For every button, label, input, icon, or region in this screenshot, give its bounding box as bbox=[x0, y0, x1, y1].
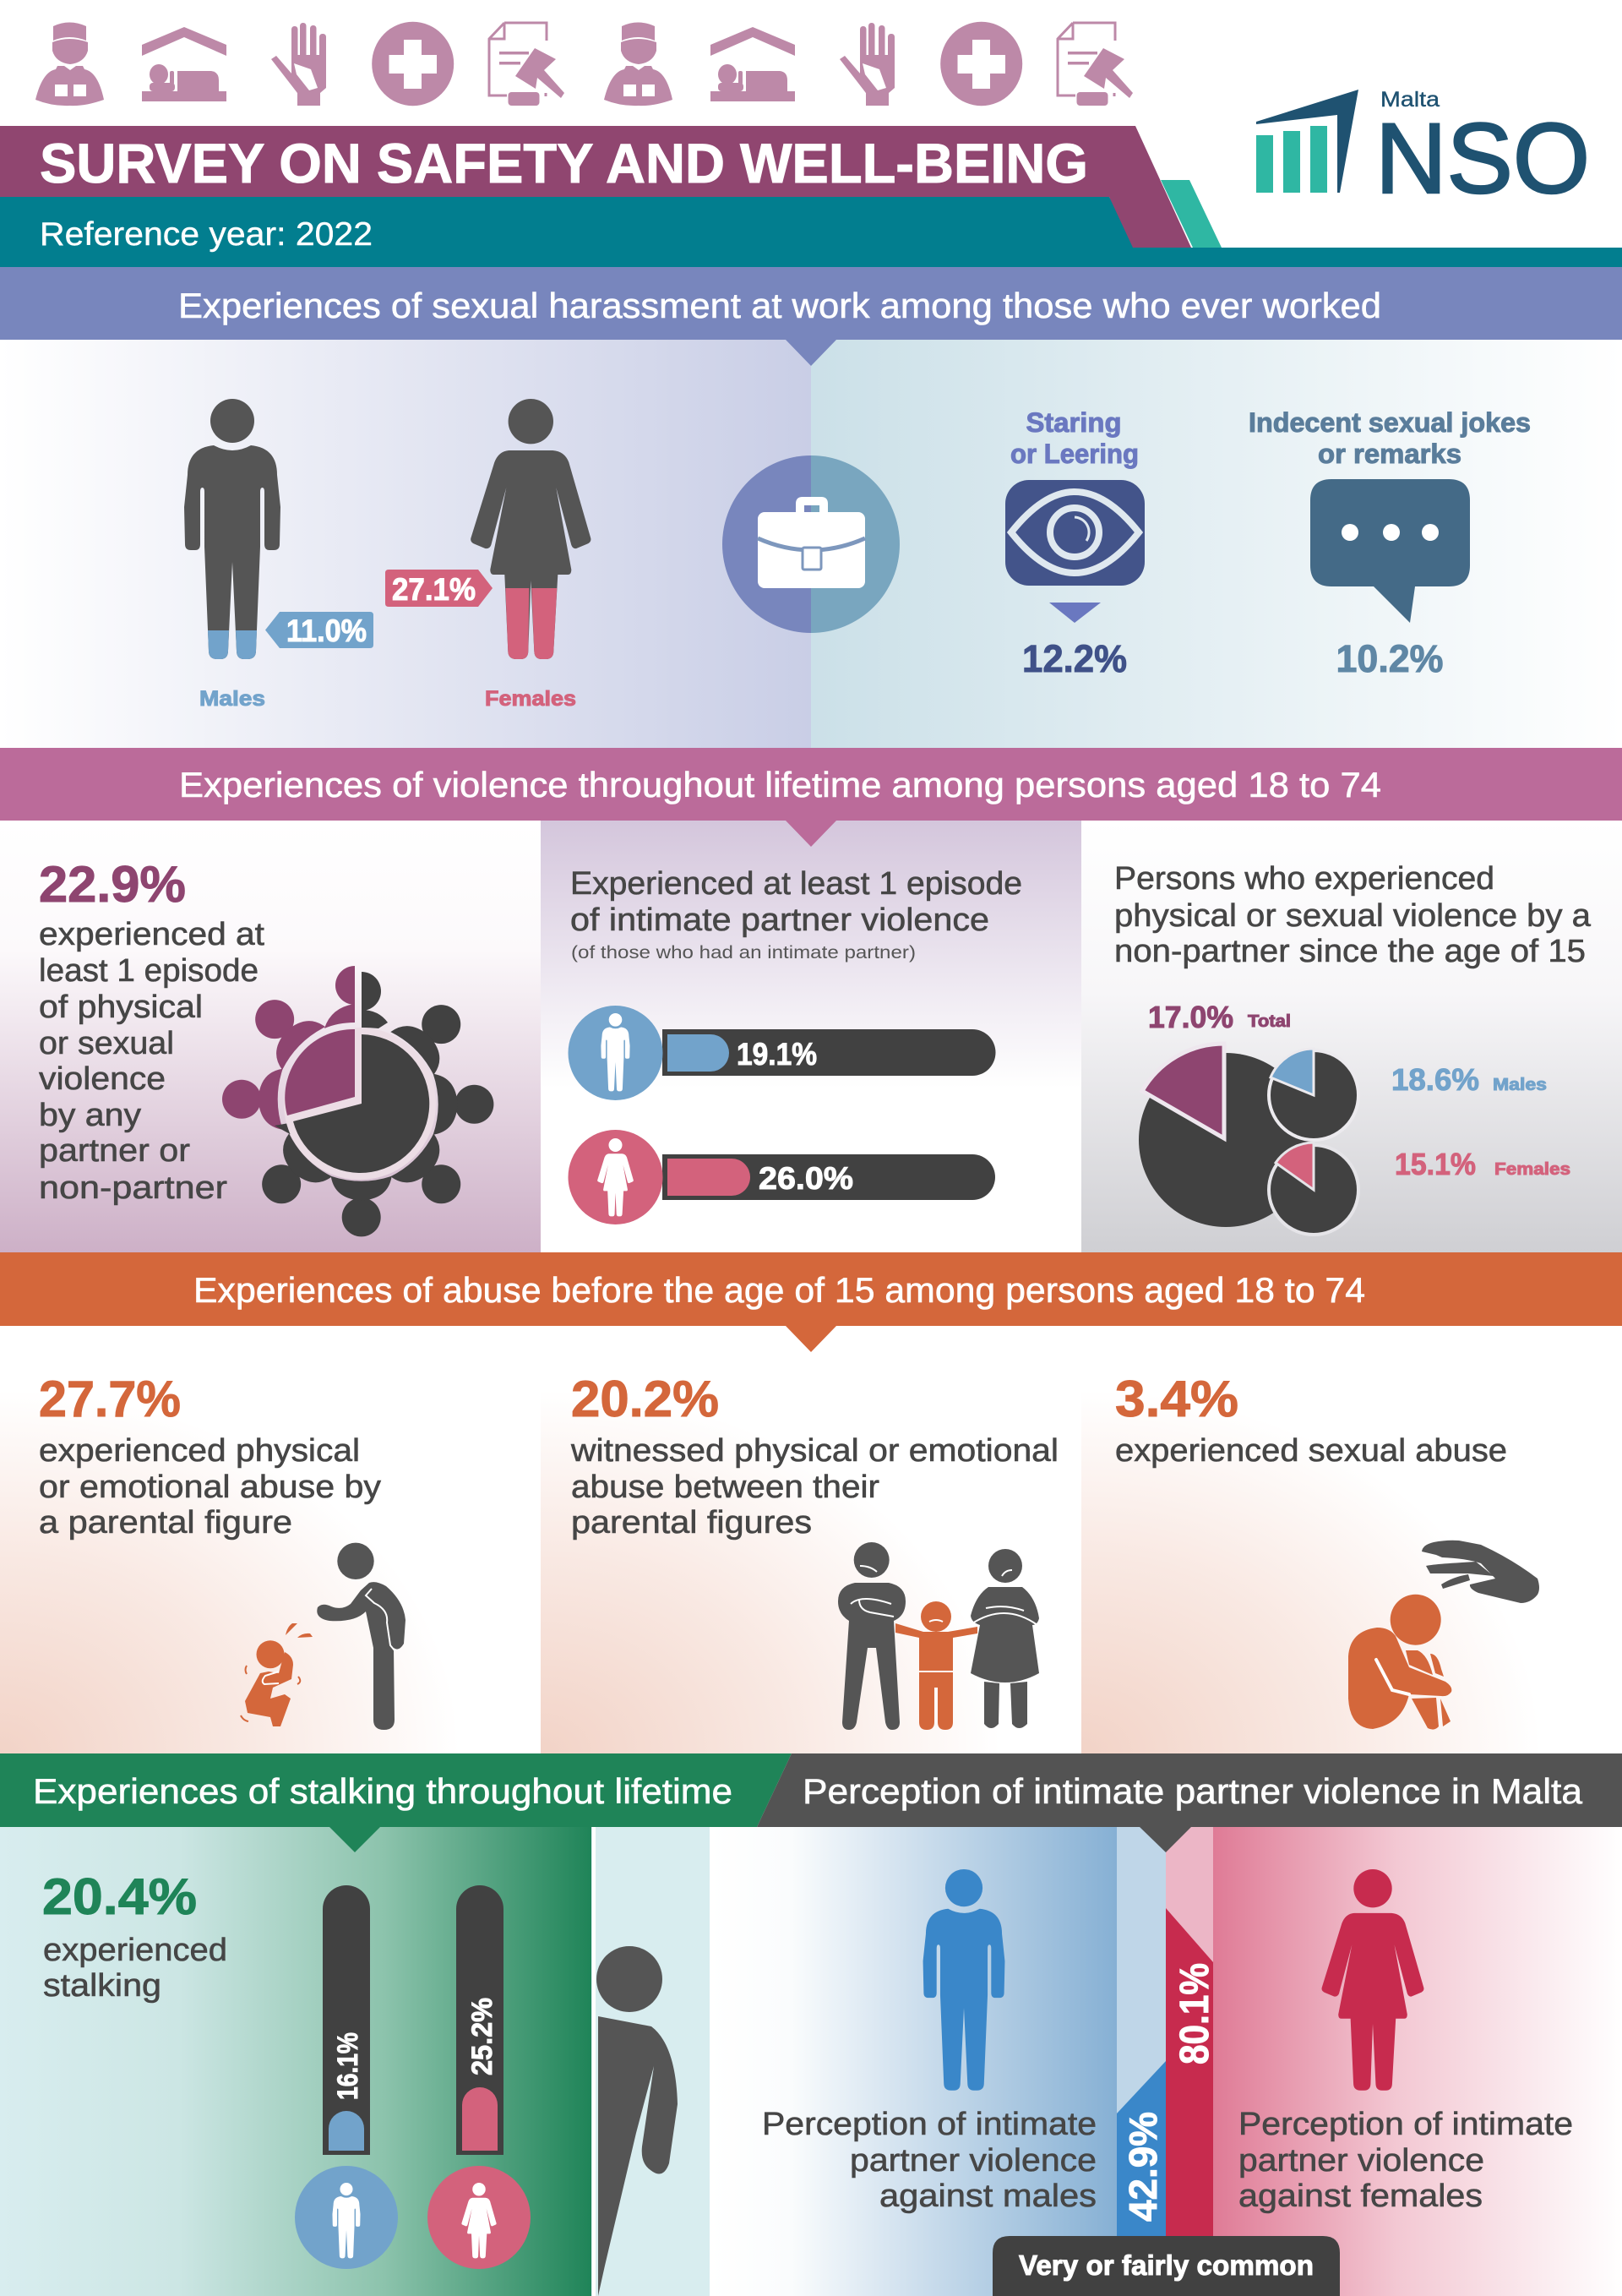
text: against males: against males bbox=[879, 2179, 1097, 2214]
text: intimate partner violence bbox=[570, 866, 1022, 963]
text: witnessed abuse: witnessed physical or emotional bbox=[570, 1433, 1059, 1469]
label: 11.0%: 11.0% bbox=[286, 614, 367, 648]
person: upper right bbox=[390, 989, 476, 1075]
person: top split bbox=[324, 966, 388, 1028]
heading band: Experiences of abuse before the age of 15 among persons aged 18 to 74 bbox=[193, 1270, 1365, 1310]
text: witnessed abuse bbox=[570, 1433, 1059, 1541]
heading band bbox=[0, 1252, 1622, 1352]
panel: sexual harassment at work bbox=[0, 267, 1622, 748]
label: males bbox=[1391, 1062, 1547, 1097]
teal accent bbox=[1161, 180, 1222, 248]
heading: staring or leering: Staring bbox=[1026, 407, 1122, 438]
person: right bbox=[433, 1074, 493, 1135]
bar: females 80.1%: 80.1% bbox=[1173, 1963, 1217, 2064]
header icon strip bbox=[35, 22, 564, 106]
icon: briefcase bbox=[722, 455, 900, 633]
bar: females 25.2% bbox=[456, 1885, 503, 2155]
reference year: Reference year: 2022 bbox=[40, 216, 373, 253]
panel: stalking throughout lifetime bbox=[0, 1753, 792, 2296]
bar: males 42.9%: 42.9% bbox=[1121, 2112, 1165, 2222]
person: lower right bbox=[390, 1133, 476, 1219]
header icon strip repeat bbox=[604, 22, 1133, 106]
text: non-partner violence: physical or sexual violence by a bbox=[1114, 898, 1592, 934]
logo: Malta NSO bbox=[1256, 88, 1590, 215]
text: any partner: experienced at bbox=[39, 917, 264, 952]
text: intimate partner violence: (of those who had an intimate partner) bbox=[571, 943, 916, 963]
value: 3.4%: 3.4% bbox=[1115, 1371, 1238, 1427]
text: intimate partner violence: of intimate partner violence bbox=[570, 903, 989, 938]
panel: abuse before age 15 bbox=[0, 1252, 1622, 1753]
text: any partner: partner or bbox=[39, 1133, 190, 1169]
title banner bbox=[0, 126, 1622, 267]
icon: medical cross bbox=[372, 22, 454, 106]
table ring bbox=[284, 1028, 436, 1180]
text: any partner: least 1 episode bbox=[39, 953, 259, 989]
label: 27.1%: 27.1% bbox=[392, 572, 476, 607]
heading band: Experiences of stalking throughout lifetime bbox=[33, 1771, 732, 1811]
table share bbox=[285, 1029, 355, 1115]
person: left (share) bbox=[222, 1069, 283, 1130]
text: sexual abuse: experienced sexual abuse bbox=[1115, 1433, 1507, 1469]
label: total: 17.0% bbox=[1148, 1000, 1233, 1034]
text: non-partner violence bbox=[1114, 861, 1592, 969]
text: parental abuse bbox=[39, 1433, 381, 1541]
icon: family bbox=[838, 1542, 1039, 1730]
column backgrounds bbox=[0, 1326, 1622, 1753]
heading band bbox=[0, 267, 1622, 366]
heading band: Perception of intimate partner violence in Malta bbox=[803, 1771, 1583, 1811]
heading band bbox=[0, 1753, 792, 1852]
text: against females bbox=[1238, 2107, 1573, 2214]
label: females bbox=[1395, 1147, 1570, 1181]
figure: male bbox=[184, 399, 280, 659]
pie: males bbox=[1267, 1049, 1360, 1142]
teal base band bbox=[0, 248, 1622, 267]
text: against females: Perception of intimate bbox=[1238, 2107, 1573, 2142]
heading: indecent jokes: or remarks bbox=[1318, 439, 1461, 469]
value: 10.2%: 10.2% bbox=[1336, 637, 1443, 680]
bar: males 16.1% bbox=[323, 1885, 370, 2155]
logo mark bbox=[1256, 90, 1358, 193]
text: non-partner violence: non-partner since the age of 15 bbox=[1114, 934, 1586, 969]
icon: adult and crying child bbox=[241, 1543, 406, 1730]
value: 27.7%: 27.7% bbox=[39, 1371, 181, 1427]
value: 22.9%: 22.9% bbox=[39, 856, 186, 913]
heading band: Experiences of violence throughout lifetime among persons aged 18 to 74 bbox=[179, 765, 1381, 804]
bar: females 25.2%: 25.2% bbox=[466, 1998, 498, 2075]
heading band bbox=[757, 1753, 1622, 1852]
heading band bbox=[0, 748, 1622, 847]
text: any partner bbox=[39, 917, 264, 1206]
text: parental abuse: or emotional abuse by bbox=[39, 1470, 381, 1505]
icon: speech bubble bbox=[1310, 479, 1470, 623]
heading: indecent jokes bbox=[1249, 407, 1531, 469]
value: 12.2%: 12.2% bbox=[1022, 637, 1127, 680]
label: Females: Females bbox=[485, 687, 576, 711]
text: stalking: stalking bbox=[43, 1968, 161, 2004]
bar: females 80.1% bbox=[1166, 1908, 1217, 2236]
text: stalking bbox=[43, 1933, 227, 2004]
bar: females 26.0% bbox=[568, 1130, 995, 1224]
icon: raised hand bbox=[271, 23, 326, 106]
text: witnessed abuse: abuse between their bbox=[571, 1470, 879, 1505]
text: any partner: non-partner bbox=[39, 1170, 227, 1206]
table remainder bbox=[293, 1034, 429, 1173]
NSO: NSO bbox=[1375, 103, 1590, 215]
value: 20.4%: 20.4% bbox=[42, 1868, 197, 1925]
icon: nurse bbox=[35, 22, 104, 106]
icon: male badge bbox=[295, 2166, 398, 2269]
label: total bbox=[1148, 1000, 1291, 1034]
legend box bbox=[993, 2236, 1340, 2296]
pie: females bbox=[1267, 1143, 1360, 1236]
title: SURVEY ON SAFETY AND WELL-BEING bbox=[40, 132, 1088, 194]
table fragment bbox=[275, 1123, 291, 1135]
text: parental abuse: experienced physical bbox=[39, 1433, 360, 1469]
text: any partner: by any bbox=[39, 1098, 141, 1133]
teal sub-banner bbox=[0, 197, 1133, 251]
person: upper left (share) bbox=[239, 984, 325, 1070]
icon: half-hidden stalker bbox=[596, 1946, 678, 2296]
icon: nurse bbox=[604, 22, 672, 106]
icon: threatening hand over curled figure bbox=[1348, 1541, 1539, 1730]
column backgrounds bbox=[0, 821, 1622, 1252]
label: males: Males bbox=[1493, 1076, 1547, 1094]
icon: house with bed bbox=[142, 27, 226, 101]
text: intimate partner violence: Experienced at least 1 episode bbox=[570, 866, 1022, 902]
label: Males: Males bbox=[199, 687, 265, 711]
text: any partner: of physical bbox=[39, 990, 203, 1025]
panel background bbox=[0, 340, 1622, 748]
Malta: Malta bbox=[1380, 88, 1440, 112]
panel: perception of intimate partner violence bbox=[710, 1753, 1622, 2296]
label: total: Total bbox=[1248, 1012, 1291, 1031]
text: stalking: experienced bbox=[43, 1933, 227, 1968]
figure: crimson female bbox=[1322, 1869, 1423, 2091]
text: against females: against females bbox=[1238, 2179, 1483, 2214]
bar: males 19.1% bbox=[568, 1006, 996, 1100]
heading: indecent jokes: Indecent sexual jokes bbox=[1249, 407, 1531, 438]
bar: females 26.0%: 26.0% bbox=[759, 1161, 853, 1196]
text: against males: Perception of intimate bbox=[762, 2107, 1097, 2142]
label: females: 15.1% bbox=[1395, 1147, 1476, 1181]
icon: house with bed bbox=[710, 27, 795, 101]
bar: males 42.9% bbox=[1117, 2061, 1166, 2236]
bar: males 19.1%: 19.1% bbox=[737, 1037, 817, 1072]
panel background bbox=[0, 1827, 710, 2296]
maroon banner bbox=[0, 126, 1191, 248]
person: lower left bbox=[246, 1133, 332, 1219]
panel: violence throughout lifetime bbox=[0, 748, 1622, 1252]
icon: raised hand bbox=[840, 23, 895, 106]
legend box: Very or fairly common bbox=[1019, 2250, 1314, 2281]
icon: eye bbox=[1005, 480, 1145, 586]
figure: blue male bbox=[923, 1869, 1004, 2091]
marker triangle bbox=[1049, 603, 1101, 623]
person: bottom bbox=[331, 1176, 392, 1236]
figure: female bbox=[471, 399, 591, 659]
icon: female badge bbox=[427, 2166, 531, 2269]
text: non-partner violence: Persons who experienced bbox=[1114, 861, 1494, 897]
icon: medical cross bbox=[940, 22, 1022, 106]
text: against females: partner violence bbox=[1238, 2143, 1484, 2179]
text: witnessed abuse: parental figures bbox=[571, 1505, 812, 1541]
heading: staring or leering bbox=[1010, 407, 1139, 469]
heading band: Experiences of sexual harassment at work among those who ever worked bbox=[178, 286, 1381, 325]
panel background bbox=[710, 1827, 1622, 2296]
icon: document and gavel bbox=[489, 23, 564, 106]
text: any partner: or sexual bbox=[39, 1026, 174, 1061]
text: against males: partner violence bbox=[850, 2143, 1097, 2179]
text: parental abuse: a parental figure bbox=[39, 1505, 292, 1541]
icon: document and gavel bbox=[1058, 23, 1133, 106]
value: 20.2%: 20.2% bbox=[571, 1371, 719, 1427]
heading: staring or leering: or Leering bbox=[1010, 439, 1139, 469]
icon: round table with people bbox=[222, 966, 493, 1236]
text: against males bbox=[762, 2107, 1097, 2214]
bar: males 16.1%: 16.1% bbox=[332, 2032, 364, 2100]
label: females: Females bbox=[1494, 1160, 1570, 1179]
label: males: 18.6% bbox=[1391, 1062, 1479, 1097]
pie: total bbox=[1139, 1044, 1313, 1227]
text: any partner: violence bbox=[39, 1061, 166, 1097]
